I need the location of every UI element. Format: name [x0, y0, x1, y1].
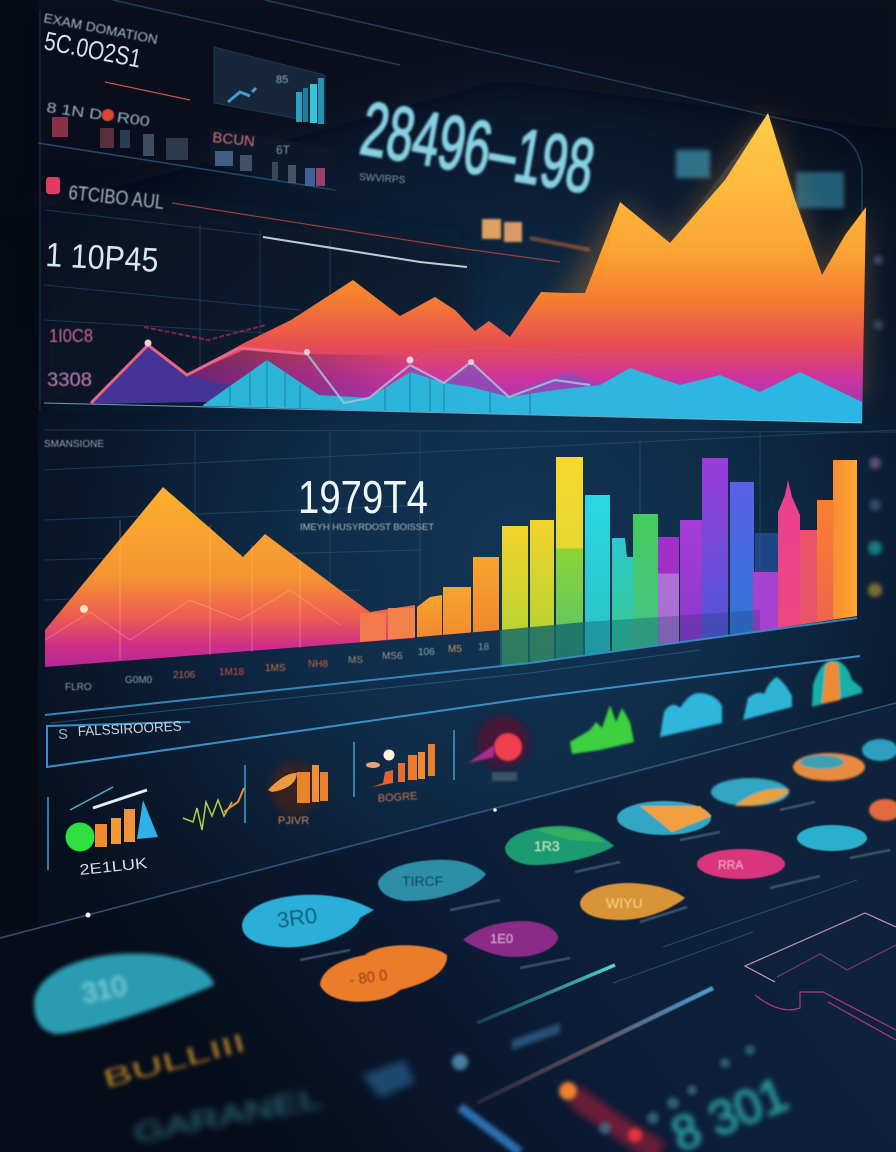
- red node: [628, 1128, 642, 1142]
- pill: cyan: [242, 895, 374, 947]
- pill: orange twin: [320, 945, 447, 1002]
- pill: green: 1R3: [534, 838, 560, 854]
- panel separator: [38, 143, 336, 190]
- reflection shading yellow: [500, 622, 585, 670]
- row: small bars left: [45, 99, 188, 160]
- dim blue backing bar: [755, 533, 779, 573]
- mountain area chart: [45, 487, 415, 667]
- icon tile: bars and dots: [66, 787, 158, 879]
- thin console lines: [613, 880, 857, 983]
- right wireframe panel: [745, 913, 896, 1040]
- chart bottom edge: [45, 618, 857, 715]
- axis labels: 2106: [173, 670, 196, 681]
- pill: teal: TIRCF: [402, 873, 443, 889]
- axis labels: 1M18: [219, 667, 244, 678]
- reflection shading cyan: [585, 617, 660, 654]
- axis labels: 1MS: [265, 663, 286, 674]
- far right readouts: [676, 150, 844, 208]
- orange chips: [482, 219, 590, 250]
- icon tile: red orb: [468, 716, 529, 781]
- blue corner: [460, 1107, 520, 1152]
- red band: [573, 1095, 660, 1152]
- pill: gold: WIYU: [606, 895, 643, 911]
- blurred dot: [452, 1054, 468, 1070]
- area highlight: [600, 113, 866, 300]
- left dark edge: [0, 0, 38, 930]
- secondary edge: [50, 650, 700, 723]
- pill: magenta: [697, 849, 785, 879]
- icon tile: orange bars: [268, 762, 328, 827]
- icon tile: orange bars two: BOGRE: [377, 790, 418, 805]
- red accent line: [105, 82, 190, 100]
- icon tile: orange bars two: [366, 744, 435, 805]
- mini chart panel two: 6T: [276, 143, 291, 157]
- pill: teal: [378, 860, 486, 901]
- blurred button: [362, 1060, 415, 1098]
- center caption: IMEYH HUSYRDOST BOISSET: [300, 522, 435, 532]
- line overlay two: [307, 354, 590, 403]
- blurred caption: [512, 1023, 560, 1050]
- heading: EXAM DOMATION: [42, 11, 159, 47]
- orange area: [187, 113, 866, 422]
- red trend line: [172, 203, 560, 262]
- dim dots: [599, 1045, 755, 1134]
- section heading bar: S: [58, 726, 68, 743]
- mini chart panel two: [210, 127, 336, 190]
- reflection shading purple: [660, 610, 760, 644]
- axis labels: G0M0: [125, 675, 153, 686]
- bar chart: [360, 457, 857, 676]
- pill: cyan: 3R0: [275, 903, 319, 933]
- left area dimming: [187, 350, 420, 410]
- section heading bar: [47, 656, 860, 767]
- lower dark console: [0, 705, 896, 1152]
- bottom right console panel: [460, 1045, 795, 1152]
- star sparkle one: [86, 912, 90, 918]
- icon tile: sparkline: [183, 788, 244, 830]
- icon tile: coloured mound: [812, 660, 862, 707]
- row: small bars left: 8 1N D0 R00: [45, 99, 151, 130]
- lilac secondary area: [400, 362, 660, 405]
- pill: purple: 1E0: [490, 931, 513, 946]
- screen frame lines: [113, 0, 862, 420]
- bottom left blurred label teal: GARANEL: [131, 1082, 324, 1149]
- pill: large cyan: 310: [79, 970, 129, 1009]
- star sparkle two: [493, 808, 497, 812]
- axis labels: MS6: [382, 651, 403, 662]
- bottom left blurred label gold: BULLIII: [100, 1029, 249, 1094]
- line nodes: [144, 340, 474, 365]
- axis labels: [65, 642, 490, 693]
- pill: orange far: [869, 799, 896, 821]
- headline caption: SWVIRPS: [359, 172, 406, 186]
- pills row: [34, 739, 896, 1034]
- console edge line: [0, 703, 896, 938]
- chart glow: [540, 113, 866, 400]
- mini chart panel two: BCUN: [212, 129, 256, 150]
- axis labels: NH8: [308, 659, 328, 670]
- separators: [48, 730, 454, 870]
- pill: purple: [463, 921, 558, 957]
- pill: gold: [580, 883, 685, 920]
- pill: green: [505, 826, 614, 865]
- dark red dashed trend: [144, 325, 266, 340]
- data point: [80, 605, 88, 613]
- pill: cyan small: [797, 825, 867, 851]
- icon tile: blue mound one: [660, 693, 722, 737]
- magenta line: [410, 348, 590, 365]
- side label b: 3308: [47, 370, 92, 391]
- axis labels: 106: [418, 647, 435, 658]
- baseline: [44, 403, 862, 423]
- axis labels: FLRO: [65, 682, 92, 693]
- small chart label: SMANSIONE: [44, 439, 104, 450]
- glow: [270, 762, 322, 814]
- pill: cyan far: [862, 739, 896, 761]
- figure: 5C.0O2S1: [42, 25, 144, 74]
- icon tile: bars and dots: 2E1LUK: [79, 855, 148, 879]
- icon tile: green chart: [570, 705, 634, 754]
- axis labels: M5: [448, 644, 462, 655]
- blue slider: [477, 988, 713, 1103]
- pill: blue orange: [617, 801, 712, 835]
- center value: 1979T4: [298, 471, 428, 523]
- panel grid: [40, 10, 896, 640]
- icon tile: orange bars: PJIVR: [278, 815, 309, 827]
- blue area: [203, 360, 862, 423]
- pill: orange twin: - 80 0: [348, 967, 389, 989]
- axis labels: 18: [478, 642, 490, 653]
- headline number: 28496–198: [355, 86, 600, 210]
- pill: orange: [793, 753, 865, 781]
- side label a: 1I0C8: [49, 326, 93, 346]
- pill captions: [300, 802, 890, 968]
- right edge indicators: [868, 255, 883, 597]
- pill: magenta: RRA: [718, 858, 743, 872]
- side value: 1 10P45: [45, 236, 159, 280]
- orange node: [559, 1082, 577, 1100]
- label row three: [46, 177, 165, 214]
- inner lines: [45, 520, 340, 660]
- top dark band: [0, 0, 896, 220]
- mini chart panel: [214, 47, 325, 124]
- axis labels: MS: [348, 655, 363, 666]
- label row three: 6TCIBO AUL: [67, 182, 165, 214]
- line overlay: [91, 345, 307, 403]
- left chart dark backing: [40, 190, 470, 404]
- pill: gold blue: [711, 778, 790, 806]
- pill: large cyan: [34, 953, 214, 1034]
- top area chart: [44, 113, 866, 423]
- blue area ticks: [230, 360, 530, 414]
- white trend line: [263, 237, 467, 267]
- purple under-area: [91, 343, 320, 404]
- icon tile: blue mound two: [743, 677, 792, 720]
- mini chart panel: 85: [276, 74, 288, 86]
- top left panel: summary: [38, 11, 336, 190]
- section heading bar: FALSSIROORES: [77, 718, 182, 739]
- cyan slider: [477, 965, 615, 1023]
